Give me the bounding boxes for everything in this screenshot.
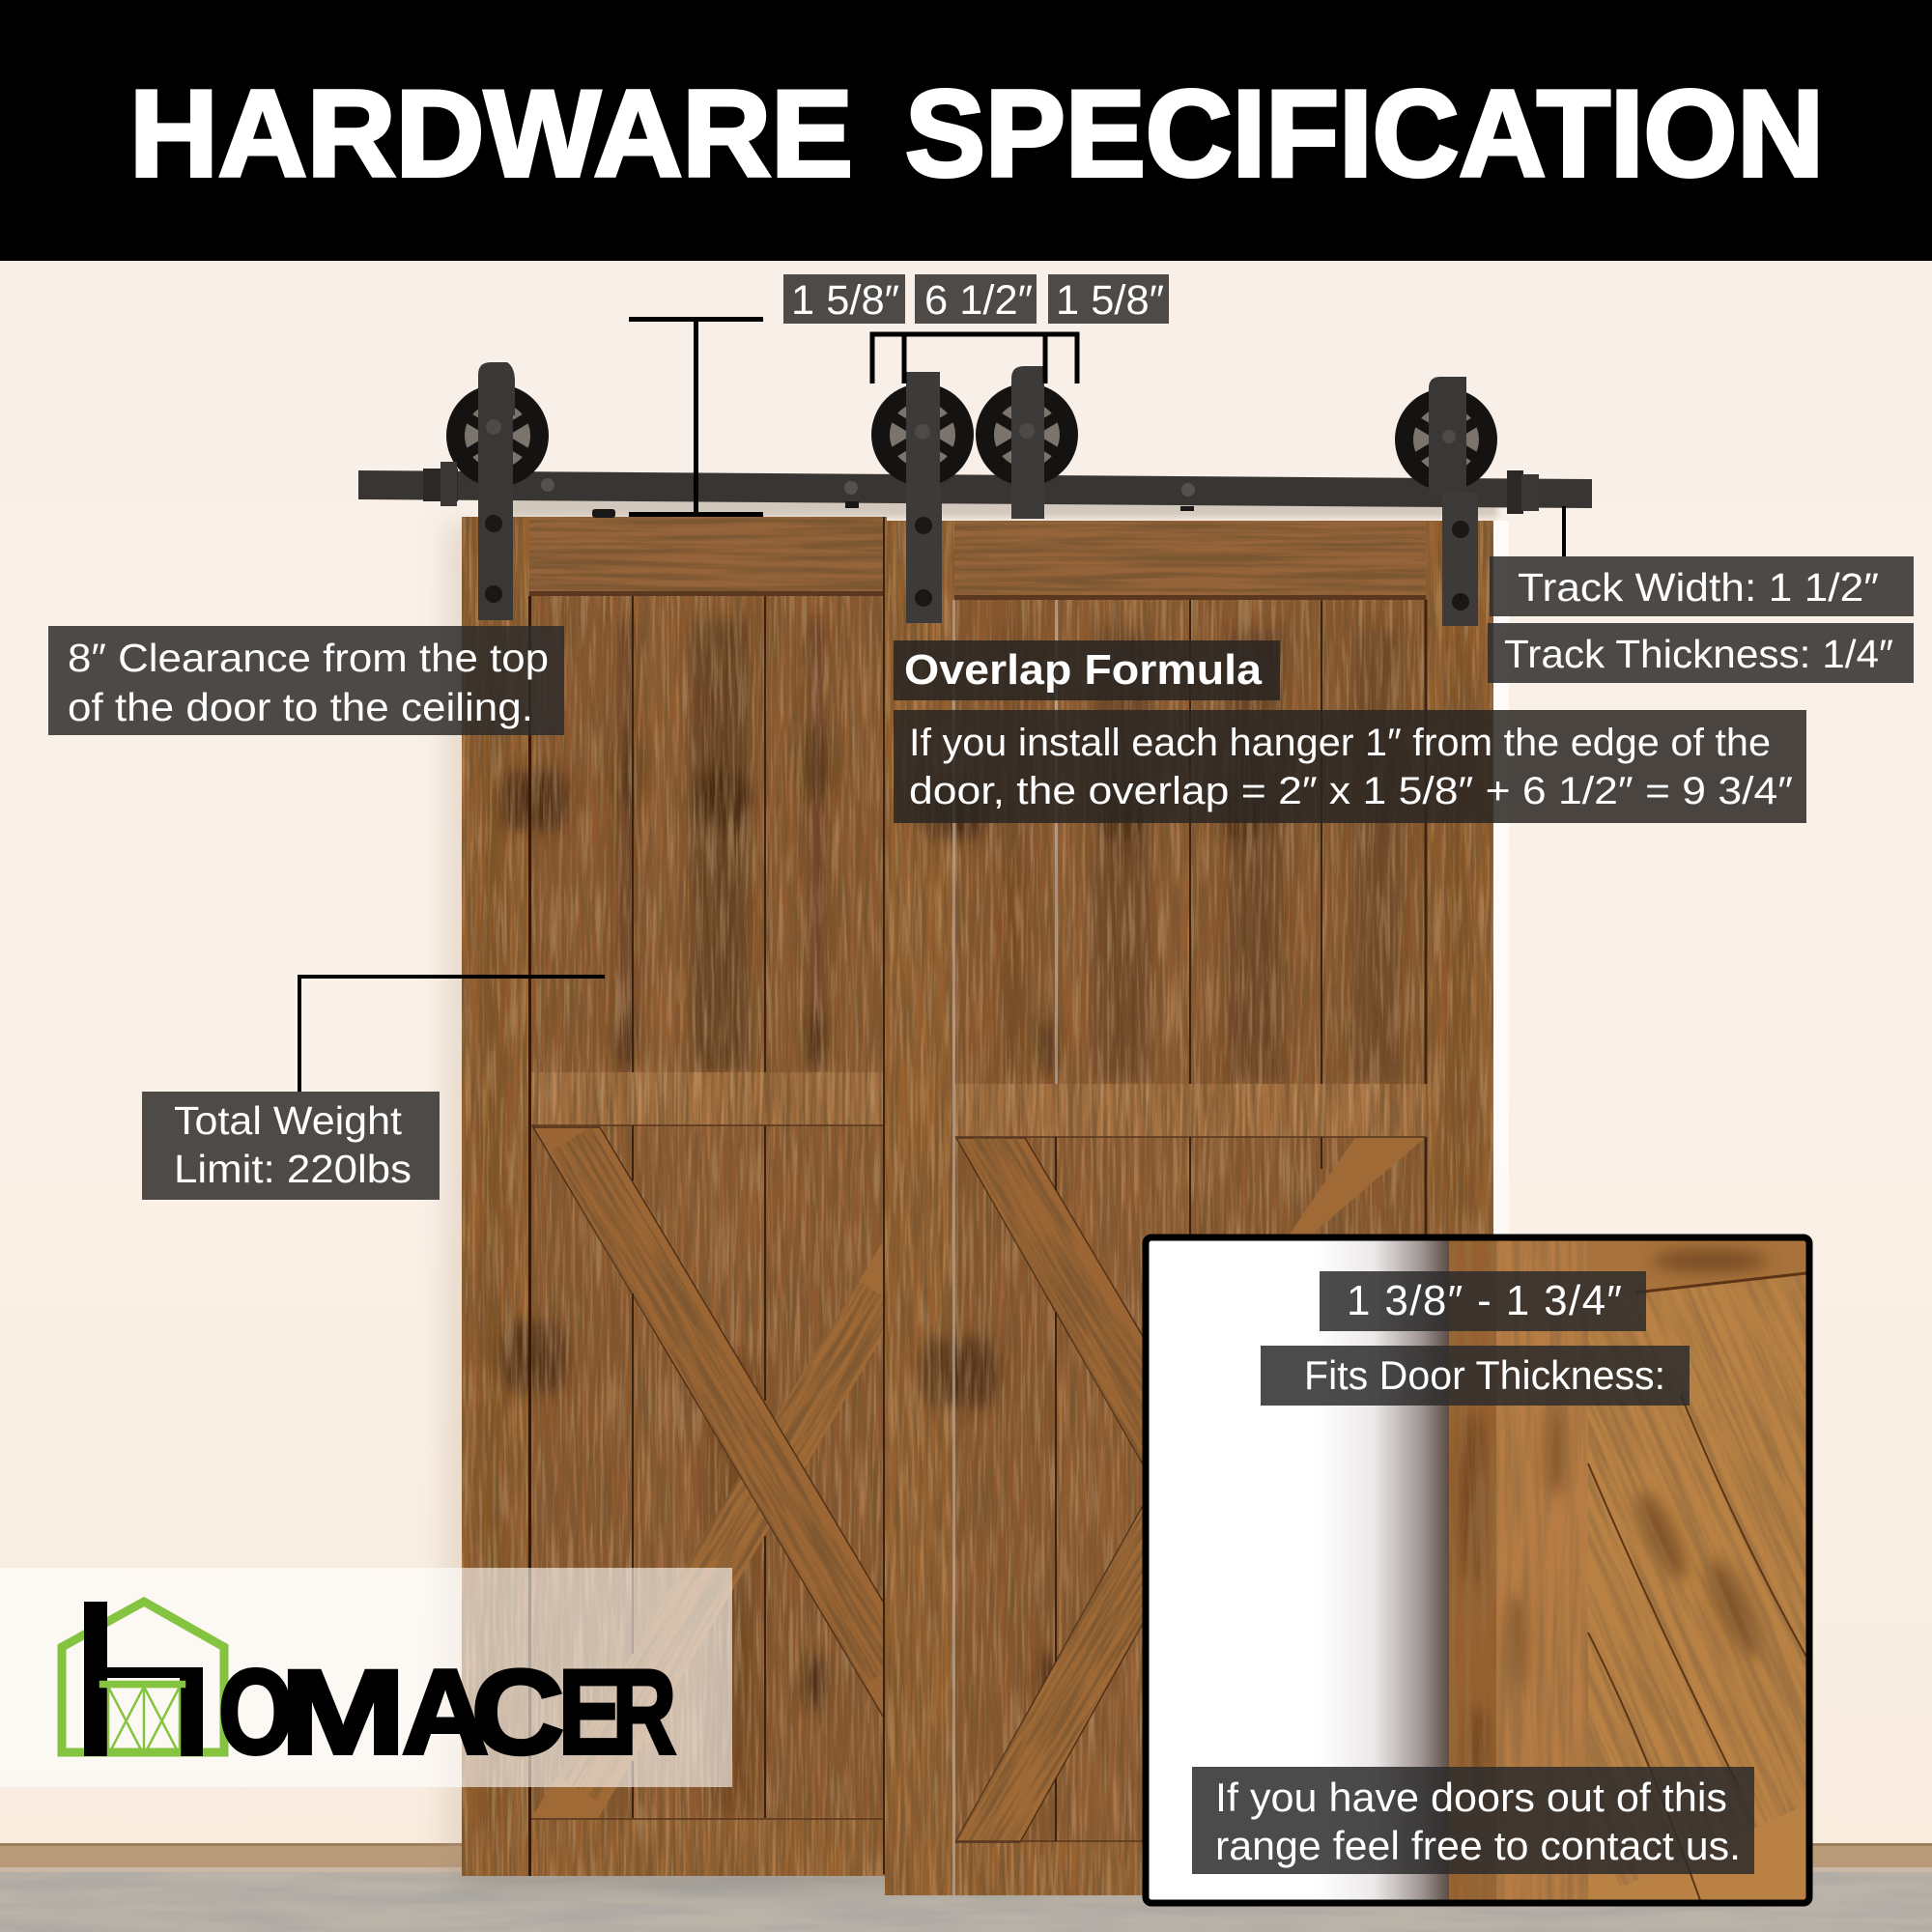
track bolts (541, 478, 1195, 497)
overlap formula heading: Overlap Formula (904, 646, 1263, 694)
door shadow on wall and floor (446, 522, 1502, 1883)
title: SPECIFICATION (905, 65, 1824, 202)
label: 1 5/8 right: 1 5/8″ (1056, 277, 1164, 324)
label: contact note: If you have doors out of this (1215, 1775, 1727, 1820)
label: clearance: of the door to the ceiling. (68, 685, 533, 729)
clearance dimension line (629, 317, 763, 517)
label: 1 5/8 left: 1 5/8″ (791, 277, 899, 324)
hanger right end (1395, 377, 1539, 626)
hanger centre right (976, 366, 1078, 519)
inset white fade (1146, 1237, 1450, 1903)
sliding door left (462, 517, 906, 1876)
label: total weight: Total Weight (174, 1098, 403, 1143)
logo wordmark: C (471, 1646, 564, 1779)
overlap formula text (894, 710, 1806, 823)
track lower brackets (592, 501, 1194, 518)
title: HARDWARE (129, 65, 853, 202)
logo wordmark: O (218, 1646, 294, 1779)
door left base (462, 517, 887, 1876)
door left mid and bottom rails (529, 1072, 885, 1876)
header bar (0, 0, 1932, 261)
strap (1429, 377, 1466, 495)
sliding door right (883, 517, 1509, 1895)
sliding track rail (358, 470, 1592, 508)
door right base (885, 521, 1493, 1895)
logo barn door (100, 1682, 185, 1755)
weight callout line (299, 977, 605, 1092)
logo wordmark (218, 1646, 676, 1779)
label: fits door thickness (1261, 1346, 1690, 1406)
inset wood (1449, 1240, 1806, 1899)
label: track width: Track Width: 1 1/2″ (1518, 565, 1879, 610)
door right cross brace (954, 1137, 1424, 1843)
label: track width (1490, 556, 1914, 616)
baseboard (0, 1843, 1932, 1872)
lower plate (1442, 493, 1478, 626)
door left planks (483, 596, 885, 1817)
overlap formula text: If you install each hanger 1″ from the edge of the (909, 722, 1771, 764)
label: contact note: range feel free to contact us. (1215, 1823, 1741, 1868)
logo wordmark: E (558, 1646, 622, 1779)
strap (906, 372, 942, 623)
logo wordmark: R (612, 1646, 676, 1779)
label: 6 1/2: 6 1/2″ (924, 277, 1033, 324)
wheel (976, 384, 1078, 486)
overlap formula heading (894, 640, 1280, 700)
logo wordmark: A (402, 1646, 489, 1779)
track shadow (502, 495, 1497, 518)
floor (0, 1872, 1932, 1932)
overlap bracket (872, 334, 1077, 384)
label: track thickness: Track Thickness: 1/4″ (1504, 632, 1893, 676)
label: fits door thickness: Fits Door Thickness: (1304, 1352, 1665, 1398)
bolts (915, 424, 932, 607)
logo H (84, 1602, 203, 1756)
label: clearance: 8″ Clearance from the top (68, 636, 549, 680)
rail stop (1507, 470, 1539, 514)
door left top rail and seams (528, 517, 885, 1876)
track callout line (1562, 506, 1566, 556)
rail stop (423, 462, 458, 506)
door left cross brace (531, 1126, 883, 1818)
strap (478, 362, 515, 620)
door right mid and bottom rails (954, 1084, 1426, 1895)
label: thickness range: 1 3/8″ - 1 3/4″ (1347, 1277, 1622, 1324)
label: total weight (142, 1092, 440, 1200)
bolt (1019, 423, 1035, 439)
door right grain (885, 521, 1493, 1895)
bolts (485, 419, 502, 603)
label: contact note (1192, 1767, 1754, 1874)
label: thickness range (1320, 1271, 1646, 1331)
label: total weight: Limit: 220lbs (174, 1147, 412, 1191)
wheel (1395, 388, 1497, 491)
logo house outline (62, 1602, 224, 1752)
inset border (1146, 1237, 1809, 1903)
door left grain (462, 517, 887, 1876)
bolts (1442, 430, 1469, 611)
label: track thickness (1488, 623, 1914, 683)
door right planks (915, 600, 1468, 1842)
hanger left end (423, 362, 549, 620)
strap (1011, 366, 1044, 519)
logo wordmark: M (280, 1646, 406, 1779)
hanger centre left (871, 372, 974, 623)
logo panel (0, 1568, 732, 1787)
overlap formula text: door, the overlap = 2″ x 1 5/8″ + 6 1/2″ = 9 3/4″ (909, 770, 1793, 812)
inset: door thickness detail (1142, 1235, 1812, 1907)
door right top rail and seams (883, 517, 1509, 1895)
title (129, 65, 1824, 202)
label: clearance (48, 626, 564, 735)
wheel (871, 384, 974, 486)
wheel (446, 384, 549, 487)
